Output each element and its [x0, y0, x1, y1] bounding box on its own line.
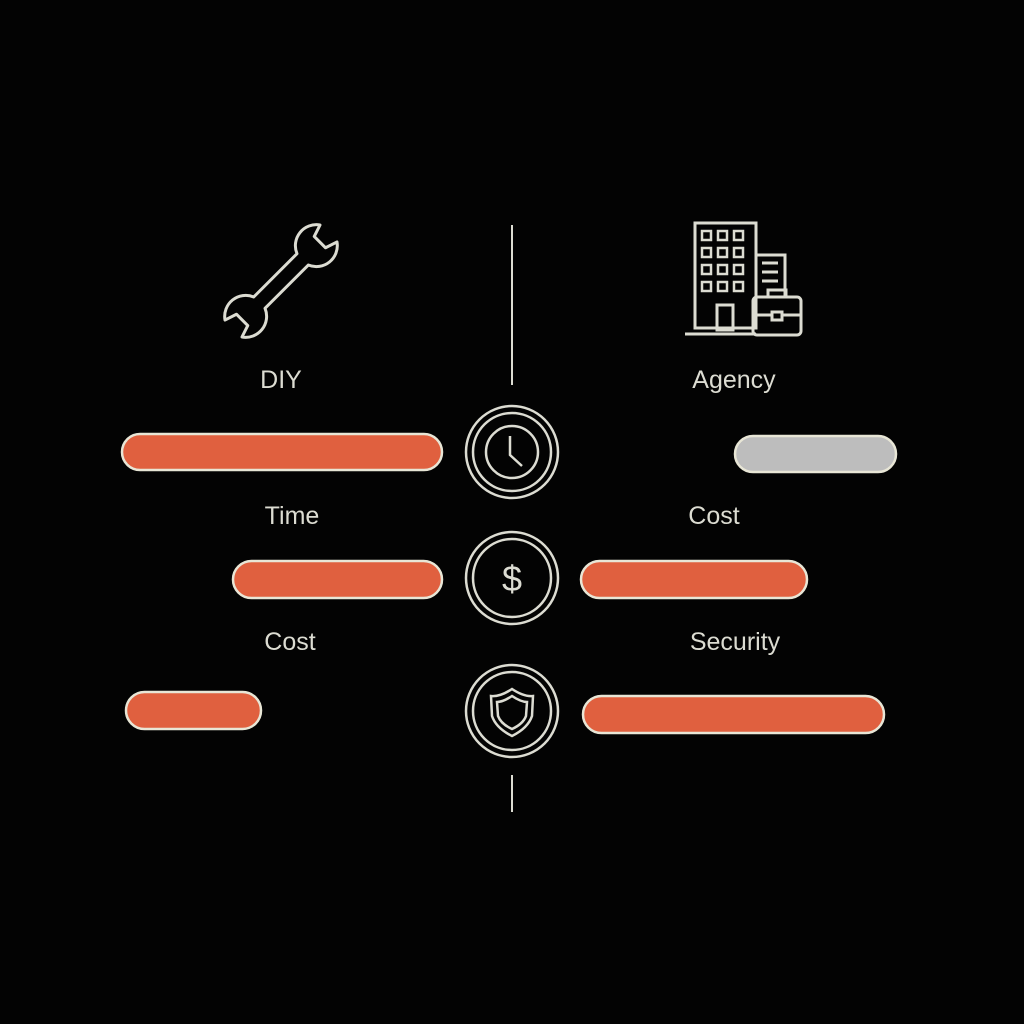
- icon: dollar: [466, 532, 558, 624]
- icon: shield: [466, 665, 558, 757]
- icon: building with briefcase: [685, 223, 801, 335]
- icon: dollar: $: [502, 558, 522, 599]
- bar: Agency cost grey: [735, 436, 896, 472]
- heading: DIY: DIY: [260, 366, 302, 394]
- bar: DIY security: [126, 692, 261, 729]
- icon: wrench: [219, 219, 343, 343]
- label: Cost (agency): Cost: [688, 502, 740, 530]
- bar: Agency cost: [581, 561, 807, 598]
- bar: DIY time: [122, 434, 442, 470]
- bar: DIY cost: [233, 561, 442, 598]
- label: Time: Time: [265, 502, 319, 530]
- label: Security: Security: [690, 628, 781, 656]
- divider line bottom: [511, 775, 513, 812]
- icon: clock: [466, 406, 558, 498]
- bar: Agency security: [583, 696, 884, 733]
- heading: Agency: Agency: [692, 366, 776, 394]
- divider line top: [511, 225, 513, 385]
- label: Cost (DIY): Cost: [264, 628, 316, 656]
